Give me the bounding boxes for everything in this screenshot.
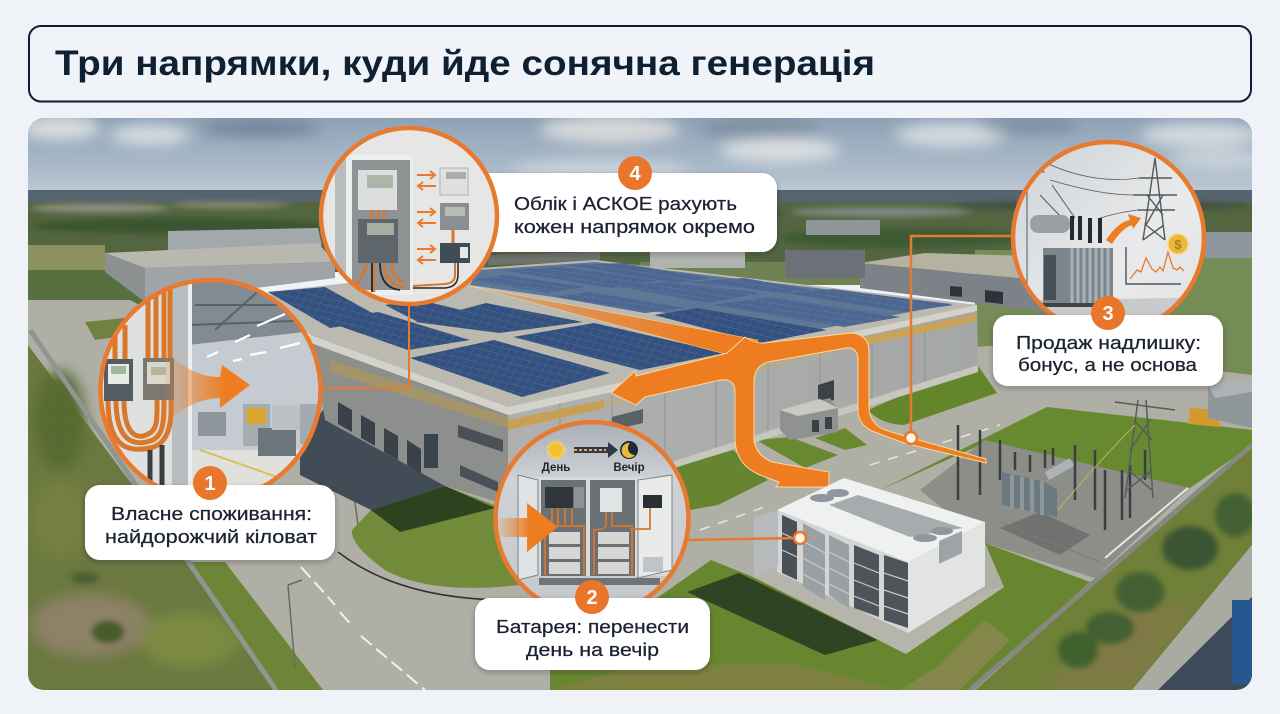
lawns: [352, 363, 1252, 690]
callout 3: surplus sale: [993, 142, 1223, 386]
label 3: бонус, а не основа: [1018, 354, 1198, 375]
label 4: [470, 173, 777, 252]
price chart: [1126, 247, 1184, 284]
icon: moon: [620, 441, 638, 459]
arrow into hall: [165, 352, 250, 422]
badge 2: 2: [586, 587, 598, 609]
label 4: Облік і АСКОЕ рахують: [514, 193, 737, 214]
sky with clouds: [28, 118, 1252, 190]
badge 3: [1091, 296, 1125, 330]
left field: [28, 318, 323, 690]
circle: meter cabinet: [321, 128, 497, 304]
road markings and lamp posts: [288, 425, 1000, 690]
title: Три напрямки, куди йде сонячна генерація: [55, 44, 875, 83]
arrow into battery: [498, 503, 558, 552]
label 4: кожен напрямок окремо: [514, 216, 755, 237]
icon: coin: [1168, 234, 1188, 254]
battery container: [753, 478, 1004, 654]
circle: battery cabinet: [496, 422, 688, 615]
circle: battery cabinet: День: [542, 462, 570, 474]
distant warehouses: [28, 220, 1252, 320]
badge 1: 1: [204, 473, 216, 495]
badge 3: 3: [1102, 303, 1114, 325]
pylon: [1115, 400, 1175, 498]
callout 2: battery: [475, 422, 710, 670]
circle: transformer and pylon: [1013, 142, 1204, 333]
transformer: [1043, 248, 1113, 303]
arrow to grid: [1106, 214, 1141, 244]
label 3: [993, 315, 1223, 386]
icon: day to night arrow: [574, 442, 618, 458]
callout 1: self consumption: [85, 280, 335, 560]
badge 4: [618, 156, 652, 190]
callout 4: metering: [321, 128, 777, 304]
label 2: день на вечір: [526, 639, 659, 660]
energy flow arrows: [470, 286, 986, 487]
badge 4: 4: [629, 163, 641, 185]
label 2: Батарея: перенести: [496, 616, 689, 637]
connector: grid sale: [905, 236, 1015, 444]
icon: sun: [548, 442, 564, 458]
badge 2: [575, 580, 609, 614]
icons: two-way arrows: [417, 171, 436, 264]
circle: battery cabinet: Вечір: [613, 462, 645, 474]
flow: rooftop branch: [470, 286, 758, 354]
icon: coin: $: [1174, 237, 1182, 252]
label 1: [85, 485, 335, 560]
label 1: найдорожчий кіловат: [105, 526, 318, 547]
badge 1: [193, 466, 227, 500]
flow: main split with arrows to factory and battery: [611, 333, 986, 487]
label 3: Продаж надлишку:: [1016, 332, 1201, 353]
distant landscape: [28, 190, 1252, 375]
substation: [920, 378, 1252, 578]
main factory building: [268, 260, 978, 515]
ground: roads and concrete: [28, 300, 1252, 690]
annex block: [780, 398, 838, 440]
solar panels: [268, 262, 954, 397]
right verge, trees and neighbouring roof: [970, 445, 1255, 690]
circle: factory hall and meters: [100, 280, 324, 500]
connector: battery: [686, 532, 806, 544]
panel: aerial photo of the factory site: [20, 116, 1270, 690]
label 2: [475, 598, 710, 670]
pylon: [1026, 158, 1177, 284]
label 1: Власне споживання:: [111, 503, 312, 524]
connector: metering: [322, 304, 409, 388]
title box: [29, 26, 1251, 102]
